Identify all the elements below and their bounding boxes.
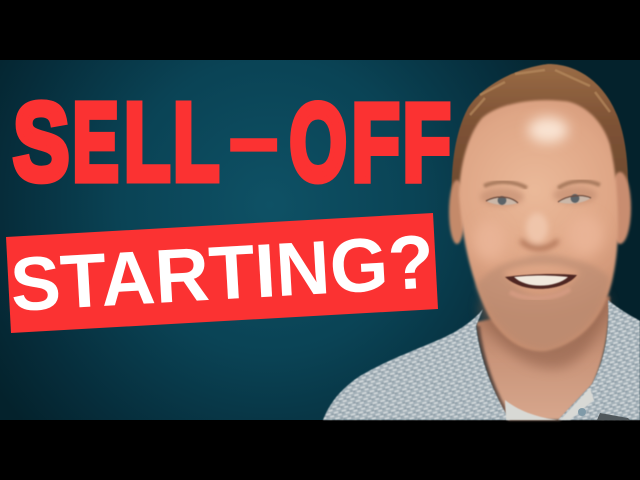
title: SELL-OFF: L: [173, 81, 219, 204]
hair highlights: [470, 70, 610, 115]
title: SELL-OFF: O: [290, 80, 347, 203]
portrait of smiling man: [323, 64, 640, 420]
title: SELL-OFF: -: [223, 74, 285, 198]
face: [459, 100, 618, 351]
neck shadow under chin: [480, 296, 608, 368]
stubble: [476, 255, 610, 350]
forehead highlight: [528, 117, 568, 143]
collar shadow: [478, 326, 510, 418]
banner background: [6, 213, 438, 333]
right eye socket: [553, 186, 597, 204]
shirt button: [578, 408, 586, 416]
cheek warmth left: [474, 220, 506, 260]
title: SELL-OFF: S: [13, 80, 70, 204]
neck: [476, 296, 610, 420]
title: SELL-OFF: [13, 74, 451, 204]
undershirt: [505, 388, 594, 420]
nose: [521, 213, 558, 248]
shirt left side: [323, 309, 510, 420]
title: SELL-OFF: E: [72, 82, 119, 204]
left eyebrow: [484, 182, 527, 188]
banner: STARTING?: [6, 213, 438, 333]
title: SELL-OFF: F: [352, 81, 400, 204]
banner text: STARTING?: [8, 219, 436, 328]
title: SELL-OFF: L: [124, 81, 170, 204]
left eye socket: [480, 188, 524, 206]
dark shirt patch: [597, 413, 630, 420]
right eyebrow: [558, 181, 600, 188]
right eye: [558, 194, 591, 204]
hair: [452, 64, 628, 215]
left eye: [486, 196, 518, 205]
mouth: [505, 274, 577, 298]
right ear: [609, 172, 631, 244]
title: SELL-OFF: F: [402, 81, 451, 204]
teal gradient panel: [0, 60, 640, 420]
left ear: [449, 180, 465, 244]
shirt right side: [558, 300, 640, 420]
cheek warmth right: [567, 215, 603, 255]
